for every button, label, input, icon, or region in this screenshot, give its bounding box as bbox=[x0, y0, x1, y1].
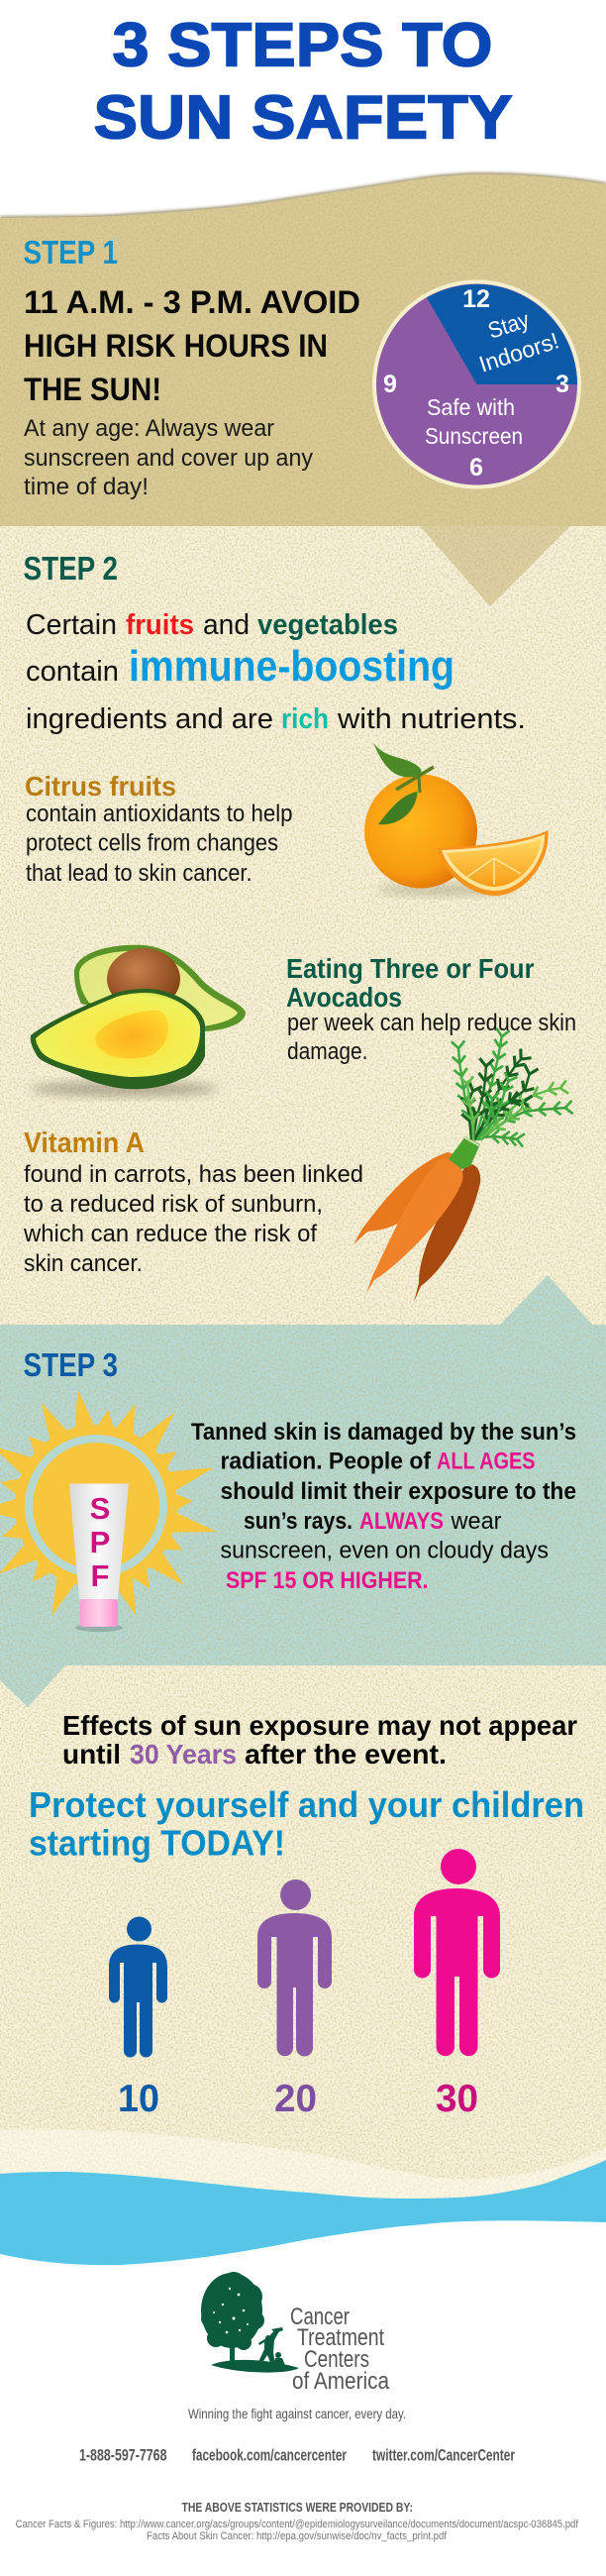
high risk hours heading: 11 A.M. - 3 P.M. AVOID bbox=[24, 284, 360, 320]
panel: step 3 bbox=[0, 1275, 606, 1665]
clock chart: Stay bbox=[485, 306, 533, 344]
icon: avocado bbox=[30, 945, 246, 1097]
high risk hours heading: HIGH RISK HOURS IN bbox=[24, 328, 328, 364]
avocado text: per week can help reduce skin bbox=[287, 1010, 576, 1036]
vitamin A text: Vitamin A bbox=[24, 1127, 145, 1159]
logo wordmark: Centers bbox=[304, 2346, 369, 2373]
citrus text: that lead to skin cancer. bbox=[26, 860, 252, 887]
sources: Facts About Skin Cancer: http://epa.gov/sunwise/doc/nv_facts_print.pdf bbox=[147, 2530, 448, 2542]
avocado text: Eating Three or Four bbox=[286, 953, 535, 984]
avocado text: damage. bbox=[287, 1038, 368, 1065]
icon: orange bbox=[364, 743, 549, 896]
intro text: rich bbox=[281, 703, 329, 735]
figure: age 10: 10 bbox=[118, 2078, 159, 2120]
step 3 text bbox=[191, 1419, 576, 1594]
figure: age 20: 20 bbox=[274, 2078, 317, 2120]
contact links: twitter.com/CancerCenter bbox=[372, 2445, 515, 2465]
clock chart: Indoors! bbox=[476, 327, 561, 377]
step 1 heading: STEP 1 bbox=[24, 234, 118, 270]
figure: age 30 bbox=[414, 1849, 500, 2120]
step 3 text: SPF 15 OR HIGHER. bbox=[226, 1567, 428, 1594]
intro text: Certain bbox=[26, 609, 117, 641]
title: SUN SAFETY bbox=[93, 83, 513, 153]
intro text: fruits bbox=[126, 609, 194, 641]
vitamin A text bbox=[23, 1127, 363, 1277]
tagline: Winning the fight against cancer, every day. bbox=[188, 2406, 406, 2421]
icon: carrots bbox=[354, 1035, 566, 1302]
logo bbox=[201, 2272, 390, 2395]
high risk hours heading bbox=[24, 284, 360, 407]
light band near shore bbox=[0, 2129, 606, 2205]
body text: At any age: Always wear bbox=[24, 415, 274, 442]
panel: step 2 bbox=[0, 526, 606, 1325]
step 2 heading: STEP 2 bbox=[24, 550, 118, 587]
high risk hours heading: THE SUN! bbox=[24, 372, 161, 407]
intro text bbox=[26, 609, 526, 735]
effects text: Effects of sun exposure may not appear bbox=[62, 1710, 577, 1741]
water wave bbox=[0, 2160, 606, 2265]
contact links bbox=[79, 2445, 515, 2465]
title bbox=[93, 12, 513, 153]
vitamin A text: found in carrots, has been linked bbox=[24, 1161, 363, 1188]
sources bbox=[16, 2500, 579, 2542]
vitamin A text: which can reduce the risk of bbox=[23, 1221, 317, 1247]
citrus text bbox=[25, 771, 293, 887]
avocado text bbox=[286, 953, 576, 1065]
contact links: 1-888-597-7768 bbox=[79, 2445, 166, 2465]
icon: sun with SPF tube: S bbox=[90, 1491, 110, 1526]
figure: age 30: 30 bbox=[436, 2078, 478, 2120]
step 3 text: sun’s rays. bbox=[244, 1508, 353, 1535]
avocado text: Avocados bbox=[286, 982, 402, 1013]
body text: sunscreen and cover up any bbox=[24, 445, 314, 472]
step 3 text: ALWAYS bbox=[359, 1508, 444, 1535]
clock chart: 6 bbox=[469, 454, 483, 482]
icon: tree bbox=[201, 2272, 299, 2373]
body text bbox=[24, 415, 314, 500]
icon: sun with SPF tube: P bbox=[90, 1525, 110, 1559]
intro text: ingredients and are bbox=[26, 703, 273, 735]
clock chart: 9 bbox=[383, 371, 397, 398]
figure: age 10 bbox=[109, 1916, 167, 2120]
panel: closing bbox=[0, 1665, 606, 2205]
step 3 text: ALL AGES bbox=[437, 1449, 535, 1474]
sources: THE ABOVE STATISTICS WERE PROVIDED BY: bbox=[182, 2500, 413, 2515]
call to action: Protect yourself and your children bbox=[29, 1784, 584, 1825]
figure: age 20 bbox=[257, 1879, 332, 2120]
logo wordmark: Treatment bbox=[297, 2324, 384, 2351]
call to action: starting TODAY! bbox=[29, 1823, 285, 1863]
step 3 text: radiation. People of bbox=[220, 1449, 432, 1474]
effects text: 30 Years bbox=[130, 1739, 237, 1770]
contact links: facebook.com/cancercenter bbox=[192, 2445, 347, 2465]
intro text: with nutrients. bbox=[337, 703, 526, 735]
step 3 text: wear bbox=[451, 1508, 501, 1535]
effects text: until bbox=[62, 1739, 121, 1770]
step 3 text: sunscreen, even on cloudy days bbox=[220, 1538, 549, 1563]
intro text: vegetables bbox=[257, 609, 398, 641]
citrus text: protect cells from changes bbox=[26, 830, 278, 856]
citrus text: contain antioxidants to help bbox=[26, 801, 293, 827]
citrus text: Citrus fruits bbox=[25, 771, 176, 802]
vitamin A text: to a reduced risk of sunburn, bbox=[24, 1191, 323, 1218]
pointer from step 3 bbox=[0, 1665, 65, 1707]
logo wordmark: of America bbox=[292, 2368, 390, 2395]
clock chart bbox=[372, 279, 581, 489]
panel: step 1 bbox=[0, 174, 606, 526]
body text: time of day! bbox=[24, 474, 149, 500]
step 3 text: Tanned skin is damaged by the sun’s bbox=[191, 1419, 576, 1446]
logo wordmark bbox=[290, 2304, 390, 2395]
effects text bbox=[62, 1710, 577, 1770]
step 3 text: should limit their exposure to the bbox=[220, 1478, 576, 1505]
step 3 heading: STEP 3 bbox=[24, 1346, 118, 1383]
icon: sun with SPF tube bbox=[0, 1387, 220, 1632]
pointer from step 1 bbox=[420, 526, 570, 606]
intro text: immune-boosting bbox=[129, 642, 454, 691]
effects text: after the event. bbox=[245, 1739, 447, 1770]
intro text: contain bbox=[26, 656, 119, 688]
clock chart: 3 bbox=[556, 371, 569, 398]
icon: sun with SPF tube: F bbox=[91, 1558, 109, 1593]
clock chart: Safe with bbox=[427, 394, 515, 420]
logo wordmark: Cancer bbox=[290, 2304, 350, 2330]
vitamin A text: skin cancer. bbox=[24, 1250, 143, 1277]
intro text: and bbox=[203, 609, 250, 641]
title: 3 STEPS TO bbox=[113, 12, 493, 79]
call to action bbox=[29, 1784, 584, 1863]
clock chart: Sunscreen bbox=[425, 423, 523, 449]
clock chart: 12 bbox=[462, 285, 490, 313]
